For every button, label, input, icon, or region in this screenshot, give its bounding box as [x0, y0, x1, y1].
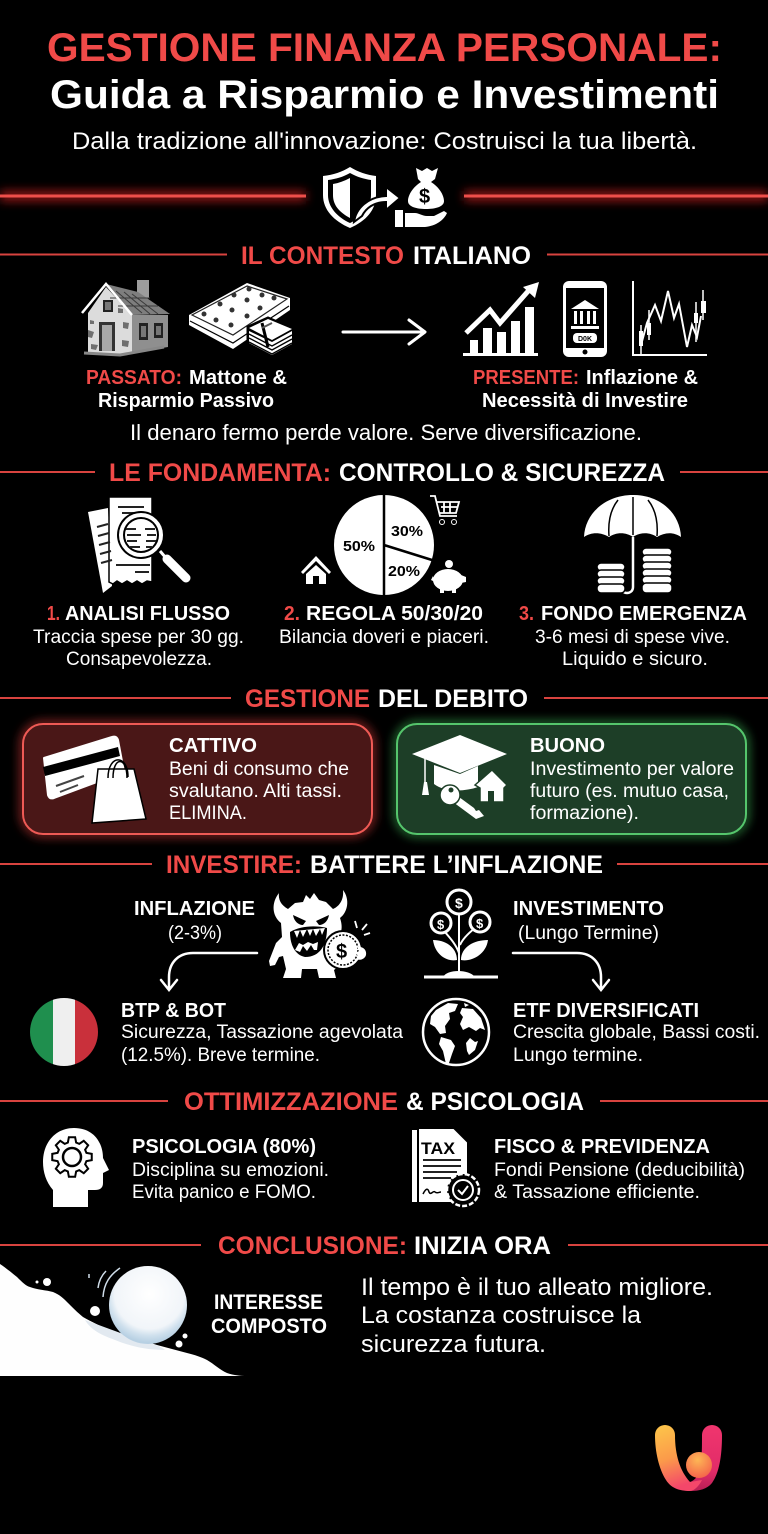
section heading: investire	[0, 851, 768, 879]
section heading: ottimizzazione: OTTIMIZZAZIONE	[184, 1088, 398, 1116]
text: cattivo	[169, 735, 349, 824]
text: psicologia: PSICOLOGIA (80%)	[132, 1136, 316, 1158]
icon: stone house	[82, 280, 170, 355]
label: presente: Inflazione &	[586, 367, 698, 389]
text: etf: ETF DIVERSIFICATI	[513, 1000, 699, 1022]
text: conclusion: Il tempo è il tuo alleato migliore.	[361, 1274, 713, 1301]
text: psicologia	[132, 1136, 329, 1203]
label: passato	[86, 367, 287, 412]
step 1: Consapevolezza.	[66, 649, 212, 670]
icon: graduation cap, key, house	[412, 735, 507, 819]
subtitle: Dalla tradizione all'innovazione: Costruisci la tua libertà.	[72, 128, 697, 155]
section heading: conclusione	[0, 1232, 768, 1260]
step 3	[519, 603, 747, 670]
text: idle money: Il denaro fermo perde valore. Serve diversificazione.	[130, 420, 642, 445]
icon: snowball on slope	[0, 1264, 247, 1376]
text: cattivo: Beni di consumo che	[169, 759, 349, 780]
icon: money plant: $	[455, 895, 463, 911]
icon: inflation monster: $	[336, 941, 347, 963]
glowing divider left	[0, 191, 306, 201]
icon: italian flag	[30, 998, 98, 1066]
text: btp and bot: Sicurezza, Tassazione agevolata	[121, 1022, 403, 1043]
text: btp and bot	[121, 1000, 403, 1066]
step 3: 3.	[519, 603, 534, 625]
label: presente: PRESENTE:	[473, 367, 579, 389]
label: passato: Risparmio Passivo	[98, 390, 274, 412]
step 3: Liquido e sicuro.	[562, 649, 708, 670]
icon: receipts and magnifier	[88, 497, 186, 593]
section heading: conclusione: INIZIA ORA	[414, 1232, 551, 1260]
section heading: investire: INVESTIRE:	[166, 851, 302, 879]
text: psicologia: Evita panico e FOMO.	[132, 1182, 316, 1203]
text: btp and bot: (12.5%). Breve termine.	[121, 1045, 320, 1066]
section heading: gestione del debito: GESTIONE	[245, 685, 370, 713]
text: fisco: & Tassazione efficiente.	[494, 1182, 700, 1203]
label: presente	[473, 367, 698, 412]
label: inflazione: INFLAZIONE	[134, 898, 255, 920]
icon: shield to money bag	[323, 167, 447, 228]
logo	[655, 1425, 722, 1491]
step 2: Bilancia doveri e piaceri.	[279, 627, 489, 648]
section heading: ottimizzazione	[0, 1088, 768, 1116]
icon: credit card and shopping bag	[43, 737, 146, 823]
icon: mattress with cash	[189, 283, 293, 355]
text: etf	[513, 1000, 760, 1066]
text: buono: BUONO	[530, 735, 605, 757]
title: GESTIONE FINANZA PERSONALE:	[47, 26, 722, 70]
panel: bad debt	[23, 724, 372, 834]
icon: money plant: $	[476, 916, 484, 931]
label: compound interest	[211, 1291, 327, 1338]
icon: shield to money bag: $	[419, 186, 430, 208]
pie chart: 50/30/20: 50%	[343, 538, 375, 555]
pie chart: 50/30/20	[334, 495, 434, 595]
glowing divider right	[464, 191, 768, 201]
label: investimento: (Lungo Termine)	[518, 923, 659, 944]
step 1	[33, 603, 244, 670]
icon: home	[301, 556, 331, 584]
text: conclusion: sicurezza futura.	[361, 1331, 546, 1358]
step 2: 2.	[284, 603, 300, 625]
icon: umbrella and coins	[584, 487, 681, 593]
icon: tax document: TAX	[421, 1139, 456, 1158]
label: inflazione	[134, 898, 255, 944]
label: compound interest: COMPOSTO	[211, 1315, 327, 1338]
icon: head with gear	[43, 1128, 109, 1207]
step 3: FONDO EMERGENZA	[541, 603, 747, 625]
text: cattivo: CATTIVO	[169, 735, 257, 757]
icon: money plant: $	[437, 917, 445, 932]
title	[47, 26, 722, 117]
section heading: le fondamenta: LE FONDAMENTA:	[109, 459, 331, 487]
section heading: le fondamenta	[0, 459, 768, 487]
icon: tax document	[412, 1128, 479, 1206]
icon: globe	[423, 999, 489, 1065]
section heading: le fondamenta: CONTROLLO & SICUREZZA	[339, 459, 665, 487]
title: Guida a Risparmio e Investimenti	[50, 73, 719, 117]
icon: banking phone: D0K	[578, 336, 592, 343]
text: conclusion	[361, 1274, 713, 1358]
text: fisco: FISCO & PREVIDENZA	[494, 1136, 710, 1158]
arrow: investment to etf	[513, 953, 609, 990]
section heading: investire: BATTERE L’INFLAZIONE	[310, 851, 603, 879]
label: inflazione: (2-3%)	[168, 923, 222, 944]
arrow: inflation to bonds	[161, 953, 257, 990]
icon: candlestick chart	[633, 281, 707, 355]
text: buono: Investimento per valore	[530, 759, 734, 780]
text: psicologia: Disciplina su emozioni.	[132, 1160, 329, 1181]
step 1: 1.	[47, 603, 60, 625]
icon: shopping cart	[430, 496, 459, 524]
icon: piggy bank	[431, 560, 466, 593]
text: buono: futuro (es. mutuo casa,	[530, 781, 729, 802]
pie chart: 50/30/20: 30%	[391, 523, 423, 540]
label: presente: Necessità di Investire	[482, 390, 688, 412]
text: buono: formazione).	[530, 803, 639, 824]
text: etf: Lungo termine.	[513, 1045, 643, 1066]
section heading: gestione del debito: DEL DEBITO	[378, 685, 528, 713]
label: passato: PASSATO:	[86, 367, 182, 389]
text: cattivo: ELIMINA.	[169, 803, 247, 824]
step 1: Traccia spese per 30 gg.	[33, 627, 244, 648]
section heading: il contesto italiano	[0, 242, 768, 270]
icon: rising bar chart	[463, 282, 539, 356]
section heading: il contesto italiano: IL CONTESTO	[241, 242, 404, 270]
step 2: REGOLA 50/30/20	[306, 603, 483, 625]
label: passato: Mattone &	[189, 367, 287, 389]
section heading: ottimizzazione: & PSICOLOGIA	[406, 1088, 584, 1116]
arrow: past to present	[343, 320, 425, 344]
icon: banking phone	[563, 281, 607, 357]
section heading: il contesto italiano: ITALIANO	[413, 242, 531, 270]
text: cattivo: svalutano. Alti tassi.	[169, 781, 342, 802]
step 2	[279, 603, 489, 648]
text: btp and bot: BTP & BOT	[121, 1000, 226, 1022]
label: investimento	[513, 898, 664, 944]
step 1: ANALISI FLUSSO	[65, 603, 230, 625]
icon: inflation monster	[269, 890, 370, 978]
text: conclusion: La costanza costruisce la	[361, 1302, 642, 1329]
step 3: 3-6 mesi di spese vive.	[535, 627, 730, 648]
pie chart: 50/30/20: 20%	[388, 563, 420, 580]
text: buono	[530, 735, 734, 824]
label: investimento: INVESTIMENTO	[513, 898, 664, 920]
section heading: conclusione: CONCLUSIONE:	[218, 1232, 407, 1260]
icon: money plant	[424, 890, 498, 977]
text: fisco: Fondi Pensione (deducibilità)	[494, 1160, 745, 1181]
text: etf: Crescita globale, Bassi costi.	[513, 1022, 760, 1043]
section heading: gestione del debito	[0, 685, 768, 713]
text: fisco	[494, 1136, 745, 1203]
panel: good debt	[397, 724, 746, 834]
label: compound interest: INTERESSE	[214, 1291, 323, 1314]
